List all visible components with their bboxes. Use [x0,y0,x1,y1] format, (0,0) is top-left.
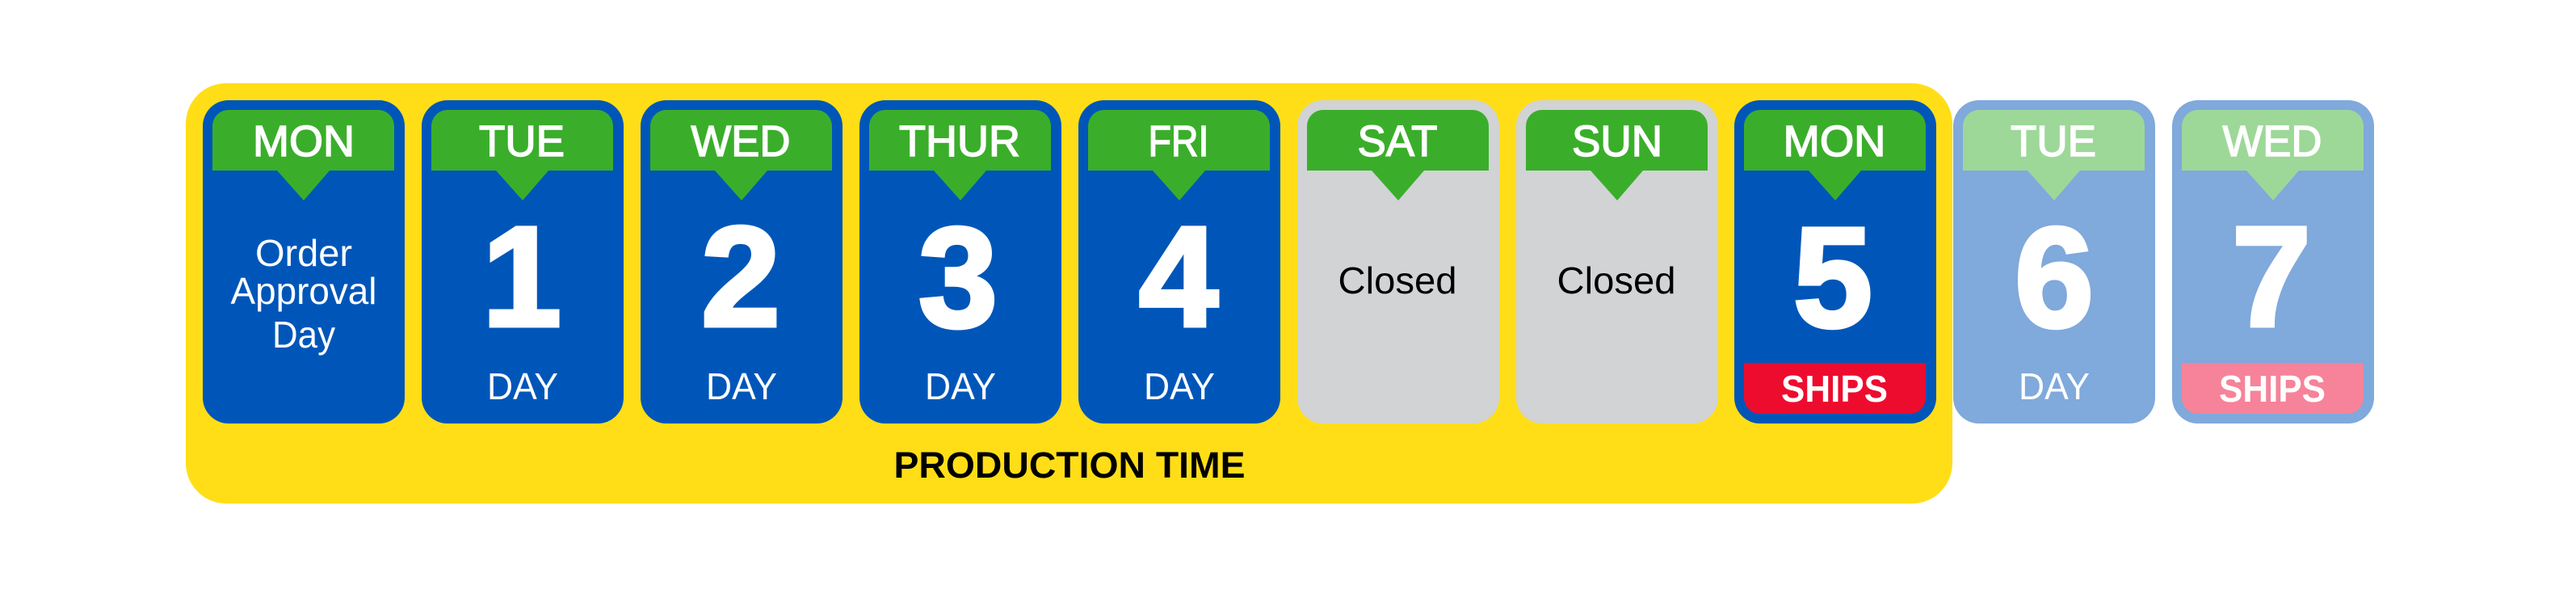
card: Monday order approval: Approval [231,270,376,312]
card: Tuesday day 6: DAY [2019,365,2090,407]
card: Saturday closed [1297,100,1499,424]
card: Tuesday day 1: DAY [487,365,558,407]
card: Tuesday day 6: TUE [2011,117,2096,166]
card: Tuesday day 1: 1 [482,198,561,356]
card: Thursday day 3: DAY [925,365,996,407]
card: Monday order approval: Order [255,232,352,274]
card: Monday day 5 ships: 5 [1793,199,1872,357]
card: Saturday closed: SAT [1357,117,1438,166]
card: Friday day 4 [1078,100,1280,424]
card: Saturday closed: Closed [1338,259,1457,301]
card: Thursday day 3: THUR [899,117,1020,166]
card: Friday day 4: 4 [1139,198,1218,356]
card: Tuesday day 1 [422,100,624,424]
card: Monday order approval: Day [272,314,335,356]
card: Wednesday day 2: WED [691,117,790,166]
heading: production time: PRODUCTION TIME [893,445,1246,486]
card: Wednesday day 7 ships [2172,100,2374,424]
card: Wednesday day 2 [641,100,843,424]
card: Wednesday day 2: 2 [701,198,780,356]
card: Sunday closed: Closed [1557,259,1675,301]
card: Thursday day 3: 3 [918,199,998,357]
card: Sunday closed: SUN [1572,117,1662,166]
card: Monday order approval [203,100,405,424]
card: Wednesday day 7 ships: WED [2223,117,2322,166]
card: Wednesday day 7 ships: 7 [2232,198,2311,356]
panel: production time background [186,83,1952,504]
card: Monday day 5 ships: MON [1784,117,1885,166]
card: Friday day 4: FRI [1149,117,1208,166]
card: Wednesday day 7 ships: SHIPS [2219,368,2326,410]
card: Monday day 5 ships [1734,100,1936,424]
card: Sunday closed [1516,100,1718,424]
card: Tuesday day 1: TUE [479,117,565,166]
card: Monday day 5 ships: SHIPS [1781,368,1888,410]
card: Tuesday day 6 [1953,100,2155,424]
card: Tuesday day 6: 6 [2015,199,2094,357]
card: Friday day 4: DAY [1144,365,1215,407]
card: Wednesday day 2: DAY [706,365,777,407]
card: Thursday day 3 [859,100,1061,424]
card: Monday order approval: MON [253,117,355,166]
